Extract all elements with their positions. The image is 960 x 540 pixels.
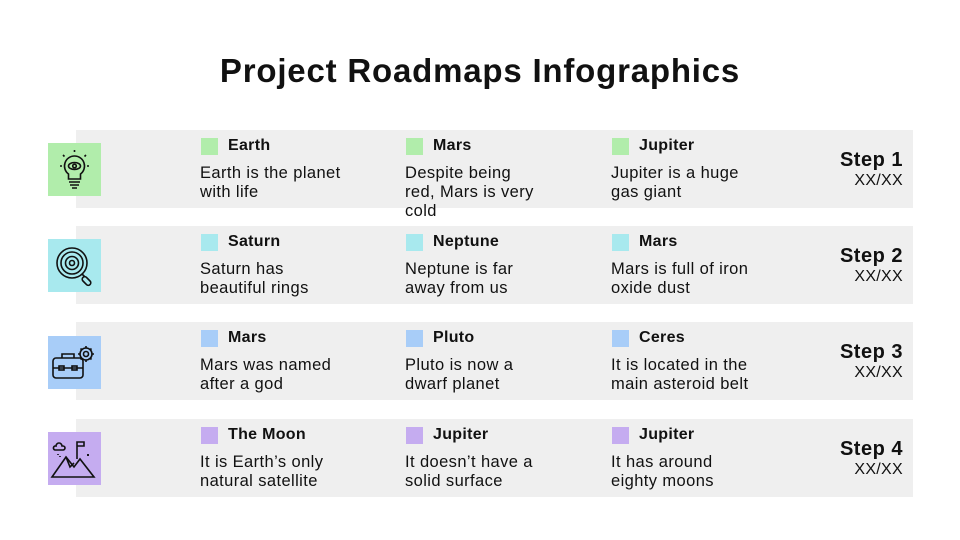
step 2 label: [840, 245, 903, 285]
text: red, Mars is very: [405, 183, 534, 201]
step 1 label: XX/XX: [854, 172, 903, 189]
row 2 column: Mars: [611, 233, 748, 297]
step 4 label: Step 4: [840, 438, 903, 460]
text: Earth is the planet: [200, 164, 341, 182]
row 2 column: Neptune: [405, 233, 513, 297]
row 3 column: Ceres: [611, 329, 748, 393]
text: Earth: [228, 137, 270, 154]
row 2 column: Saturn: [200, 233, 309, 297]
text: Neptune: [433, 233, 499, 250]
text: Pluto is now a: [405, 356, 513, 374]
row 3 background: [76, 322, 913, 400]
text: after a god: [200, 375, 283, 393]
text: Mars: [433, 137, 472, 154]
text: Jupiter: [433, 426, 488, 443]
text: Saturn has: [200, 260, 284, 278]
icon: mountain flag: [48, 432, 101, 485]
text: Pluto: [433, 329, 474, 346]
row 1 column: Mars: [405, 137, 534, 220]
row 2 background: [76, 226, 913, 304]
text: eighty moons: [611, 472, 714, 490]
step 3 label: Step 3: [840, 341, 903, 363]
row 4 column: Jupiter: [405, 426, 533, 490]
text: with life: [200, 183, 259, 201]
text: It is Earth’s only: [200, 453, 323, 471]
text: beautiful rings: [200, 279, 309, 297]
text: away from us: [405, 279, 508, 297]
text: Mars: [228, 329, 267, 346]
row 3 column: Mars: [200, 329, 331, 393]
text: main asteroid belt: [611, 375, 748, 393]
text: Mars is full of iron: [611, 260, 748, 278]
text: Jupiter is a huge: [611, 164, 739, 182]
row 1 column: Earth: [200, 137, 341, 201]
text: Mars was named: [200, 356, 331, 374]
text: It has around: [611, 453, 713, 471]
text: Saturn: [228, 233, 280, 250]
text: Neptune is far: [405, 260, 513, 278]
text: oxide dust: [611, 279, 690, 297]
text: It is located in the: [611, 356, 747, 374]
icon: lightbulb eye: [48, 143, 101, 196]
icon: target magnifier: [48, 239, 101, 292]
step 2 label: XX/XX: [854, 268, 903, 285]
icon: briefcase gear: [48, 336, 101, 389]
text: Despite being: [405, 164, 511, 182]
row 4 column: The Moon: [200, 426, 323, 490]
text: Ceres: [639, 329, 685, 346]
row 1 background: [76, 130, 913, 208]
step 2 label: Step 2: [840, 245, 903, 267]
row 3 column: Pluto: [405, 329, 513, 393]
text: dwarf planet: [405, 375, 500, 393]
title: Project Roadmaps Infographics: [220, 52, 740, 89]
text: gas giant: [611, 183, 682, 201]
text: Mars: [639, 233, 678, 250]
text: cold: [405, 202, 437, 220]
step 4 label: XX/XX: [854, 461, 903, 478]
row 1 column: Jupiter: [611, 137, 739, 201]
step 3 label: [840, 341, 903, 381]
row 4 background: [76, 419, 913, 497]
row 4 column: Jupiter 2: [611, 426, 714, 490]
step 1 label: [840, 149, 903, 189]
step 1 label: Step 1: [840, 149, 903, 171]
text: The Moon: [228, 426, 306, 443]
text: natural satellite: [200, 472, 318, 490]
text: solid surface: [405, 472, 503, 490]
step 3 label: XX/XX: [854, 364, 903, 381]
text: It doesn’t have a: [405, 453, 533, 471]
step 4 label: [840, 438, 903, 478]
text: Jupiter: [639, 137, 694, 154]
text: Jupiter: [639, 426, 694, 443]
